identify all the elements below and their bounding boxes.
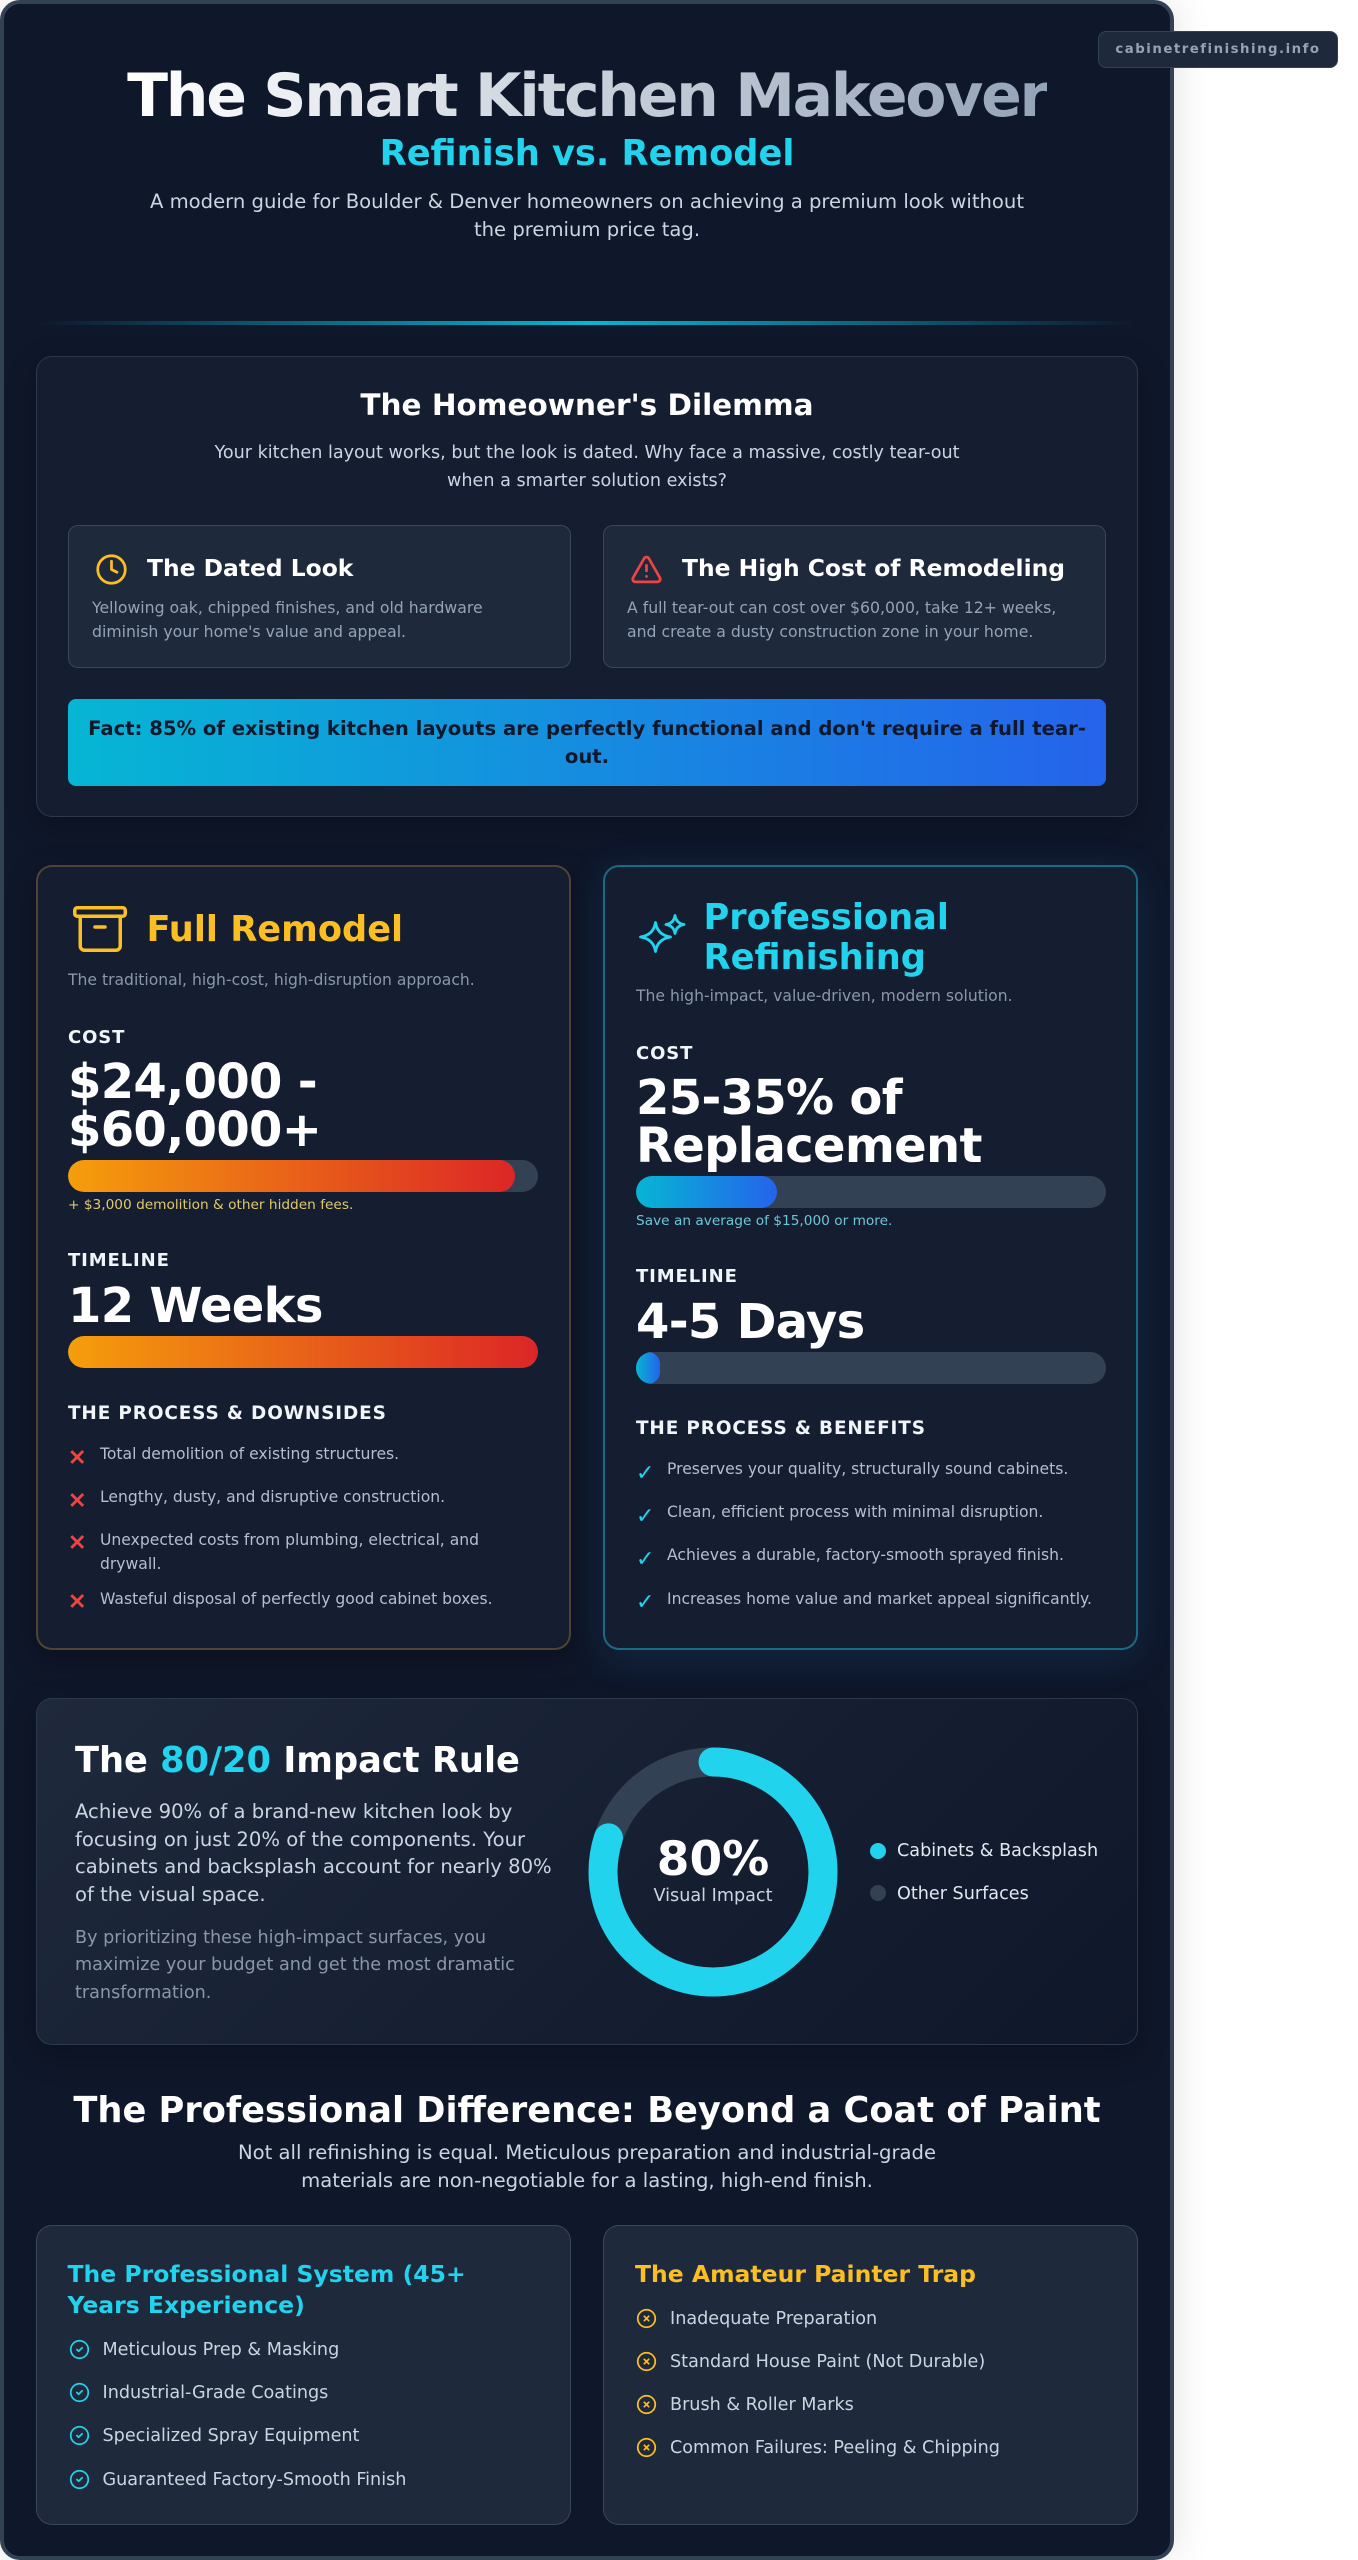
card: the dated look bbox=[68, 525, 571, 668]
item: Unexpected costs from plumbing, electrical, and bbox=[100, 1531, 479, 1549]
cost bar fill bbox=[68, 1160, 514, 1192]
item: Total demolition of existing structures. bbox=[100, 1445, 399, 1463]
cost value: Replacement bbox=[636, 1118, 982, 1174]
remodel heading: Full Remodel bbox=[146, 908, 403, 950]
item: Common Failures: Peeling & Chipping bbox=[670, 2438, 1000, 2458]
legend label: Other Surfaces bbox=[897, 1884, 1029, 1904]
icon: x circle bbox=[636, 2438, 656, 2458]
cost label: COST bbox=[636, 1043, 693, 1064]
header divider bbox=[36, 321, 1138, 325]
legend bbox=[870, 1841, 1098, 1904]
impact text: cabinets and backsplash account for nearly 80% bbox=[75, 1855, 552, 1878]
remodel summary: The traditional, high-cost, high-disruption approach. bbox=[68, 971, 475, 989]
timeline label: TIMELINE bbox=[68, 1250, 170, 1271]
downsides heading: THE PROCESS & DOWNSIDES bbox=[68, 1403, 387, 1424]
cost value: $24,000 - bbox=[68, 1054, 317, 1110]
benefits heading: THE PROCESS & BENEFITS bbox=[636, 1418, 926, 1439]
item: Preserves your quality, structurally sound cabinets. bbox=[667, 1460, 1068, 1478]
site badge: cabinetrefinishing.info bbox=[1115, 42, 1321, 57]
item: drywall. bbox=[100, 1555, 161, 1573]
card text: diminish your home's value and appeal. bbox=[92, 622, 406, 641]
dilemma intro bbox=[214, 443, 960, 491]
panel: professional system bbox=[36, 2225, 571, 2525]
impact heading: The 80/20 Impact Rule bbox=[75, 1740, 520, 1780]
system heading: The Professional System (45+ bbox=[68, 2260, 466, 2288]
item bbox=[100, 1531, 479, 1573]
system heading: Years Experience) bbox=[68, 2290, 305, 2318]
check: ✓ bbox=[636, 1590, 654, 1615]
cost bar bbox=[636, 1176, 1106, 1208]
icon: check circle bbox=[70, 2340, 90, 2360]
item: Achieves a durable, factory-smooth sprayed finish. bbox=[667, 1546, 1064, 1564]
item: Clean, efficient process with minimal disruption. bbox=[667, 1503, 1043, 1521]
item: Inadequate Preparation bbox=[670, 2309, 877, 2329]
timeline value: 4-5 Days bbox=[636, 1294, 864, 1350]
item: Industrial-Grade Coatings bbox=[102, 2383, 328, 2403]
panel: amateur painter trap bbox=[603, 2225, 1138, 2525]
donut chart bbox=[588, 1748, 838, 1996]
impact text: focusing on just 20% of the components. Your bbox=[75, 1828, 525, 1850]
item: Increases home value and market appeal significantly. bbox=[667, 1590, 1092, 1608]
section intro bbox=[238, 2141, 936, 2192]
icon: x circle bbox=[636, 2352, 656, 2372]
card text bbox=[92, 598, 483, 641]
check: ✓ bbox=[636, 1461, 654, 1486]
mark: ✕ bbox=[68, 1446, 86, 1471]
timeline value: 12 Weeks bbox=[68, 1278, 323, 1334]
cost label: COST bbox=[68, 1027, 125, 1048]
dilemma heading: The Homeowner's Dilemma bbox=[360, 388, 814, 422]
timeline bar fill bbox=[68, 1336, 538, 1368]
subtitle: Refinish vs. Remodel bbox=[380, 132, 794, 174]
timeline bar bbox=[636, 1352, 1106, 1384]
icon: x circle bbox=[636, 2308, 656, 2328]
icon: warning triangle bbox=[631, 556, 662, 584]
donut label: Visual Impact bbox=[654, 1886, 772, 1906]
icon: check circle bbox=[70, 2470, 90, 2490]
card: high cost of remodeling bbox=[603, 525, 1106, 668]
impact secondary text: transformation. bbox=[75, 1982, 211, 2002]
intro text: A modern guide for Boulder & Denver homeowners on achieving a premium look without bbox=[150, 190, 1024, 213]
card text: Yellowing oak, chipped finishes, and old hardware bbox=[92, 598, 483, 617]
impact secondary text: maximize your budget and get the most dramatic bbox=[75, 1955, 515, 1975]
section heading: The Professional Difference: Beyond a Coat of Paint bbox=[73, 2090, 1101, 2131]
item: Brush & Roller Marks bbox=[670, 2395, 854, 2415]
intro text bbox=[150, 190, 1024, 241]
check: ✓ bbox=[636, 1504, 654, 1529]
impact text: Achieve 90% of a brand-new kitchen look by bbox=[75, 1800, 512, 1823]
section intro: Not all refinishing is equal. Meticulous preparation and industrial-grade bbox=[238, 2141, 936, 2164]
card heading: The High Cost of Remodeling bbox=[682, 554, 1065, 582]
timeline bar bbox=[68, 1336, 538, 1368]
benefits list bbox=[636, 1460, 1092, 1615]
legend label: Cabinets & Backsplash bbox=[897, 1841, 1098, 1861]
item: Guaranteed Factory-Smooth Finish bbox=[102, 2470, 406, 2490]
downsides list bbox=[68, 1445, 493, 1615]
dilemma intro: when a smarter solution exists? bbox=[447, 471, 727, 491]
icon: check circle bbox=[70, 2426, 90, 2446]
dilemma intro: Your kitchen layout works, but the look is dated. Why face a massive, costly tear-out bbox=[214, 443, 960, 463]
cost bar fill bbox=[636, 1176, 777, 1208]
card text: A full tear-out can cost over $60,000, take 12+ weeks, bbox=[627, 598, 1056, 617]
impact text: of the visual space. bbox=[75, 1882, 266, 1906]
donut value: 80% bbox=[657, 1832, 769, 1887]
refinishing heading: Professional bbox=[704, 897, 949, 938]
icon: check circle bbox=[70, 2382, 90, 2402]
item: Wasteful disposal of perfectly good cabinet boxes. bbox=[100, 1590, 493, 1608]
intro text: the premium price tag. bbox=[474, 218, 700, 241]
check: ✓ bbox=[636, 1547, 654, 1572]
icon: x circle bbox=[636, 2394, 656, 2414]
cost note: + $3,000 demolition & other hidden fees. bbox=[68, 1197, 353, 1213]
fact banner bbox=[68, 699, 1106, 786]
item: Specialized Spray Equipment bbox=[102, 2426, 359, 2446]
impact text bbox=[75, 1800, 552, 1906]
icon: archive box bbox=[73, 906, 127, 952]
item: Lengthy, dusty, and disruptive construction. bbox=[100, 1488, 445, 1506]
section intro: materials are non-negotiable for a lasting, high-end finish. bbox=[301, 2169, 873, 2192]
impact secondary text: By prioritizing these high-impact surfaces, you bbox=[75, 1928, 486, 1948]
card text bbox=[627, 598, 1056, 641]
impact secondary text bbox=[75, 1928, 515, 2002]
timeline bar fill bbox=[636, 1352, 660, 1384]
mark: ✕ bbox=[68, 1489, 86, 1514]
system heading bbox=[67, 2260, 466, 2318]
fact banner: Fact: 85% of existing kitchen layouts are perfectly functional and don't require a full tear- bbox=[88, 717, 1086, 740]
card heading: The Dated Look bbox=[147, 554, 353, 582]
panel: homeowner's dilemma bbox=[36, 356, 1138, 817]
cost value: 25-35% of bbox=[636, 1070, 902, 1126]
cost value bbox=[68, 1054, 321, 1158]
panel: 80/20 impact rule bbox=[36, 1698, 1138, 2045]
timeline label: TIMELINE bbox=[636, 1266, 738, 1287]
icon: clock bbox=[96, 554, 127, 585]
mark: ✕ bbox=[68, 1590, 86, 1615]
legend dot: other bbox=[870, 1885, 886, 1901]
refinishing summary: The high-impact, value-driven, modern solution. bbox=[636, 987, 1013, 1005]
trap heading: The Amateur Painter Trap bbox=[635, 2260, 976, 2288]
fact banner: out. bbox=[565, 745, 609, 768]
item: Meticulous Prep & Masking bbox=[102, 2340, 339, 2360]
mark: ✕ bbox=[68, 1531, 86, 1556]
cost value bbox=[636, 1070, 982, 1174]
legend dot: cabinets bbox=[870, 1843, 886, 1859]
site badge bbox=[1098, 31, 1338, 68]
cost bar bbox=[68, 1160, 538, 1192]
panel: professional refinishing bbox=[603, 865, 1138, 1650]
panel: full remodel bbox=[36, 865, 571, 1650]
card text: and create a dusty construction zone in your home. bbox=[627, 622, 1033, 641]
cost value: $60,000+ bbox=[68, 1102, 321, 1158]
refinishing heading bbox=[704, 897, 949, 978]
title: The Smart Kitchen Makeover bbox=[127, 61, 1047, 131]
refinishing heading: Refinishing bbox=[704, 937, 926, 978]
item: Standard House Paint (Not Durable) bbox=[670, 2352, 985, 2372]
icon: sparkles bbox=[639, 914, 686, 953]
cost note: Save an average of $15,000 or more. bbox=[636, 1213, 892, 1229]
